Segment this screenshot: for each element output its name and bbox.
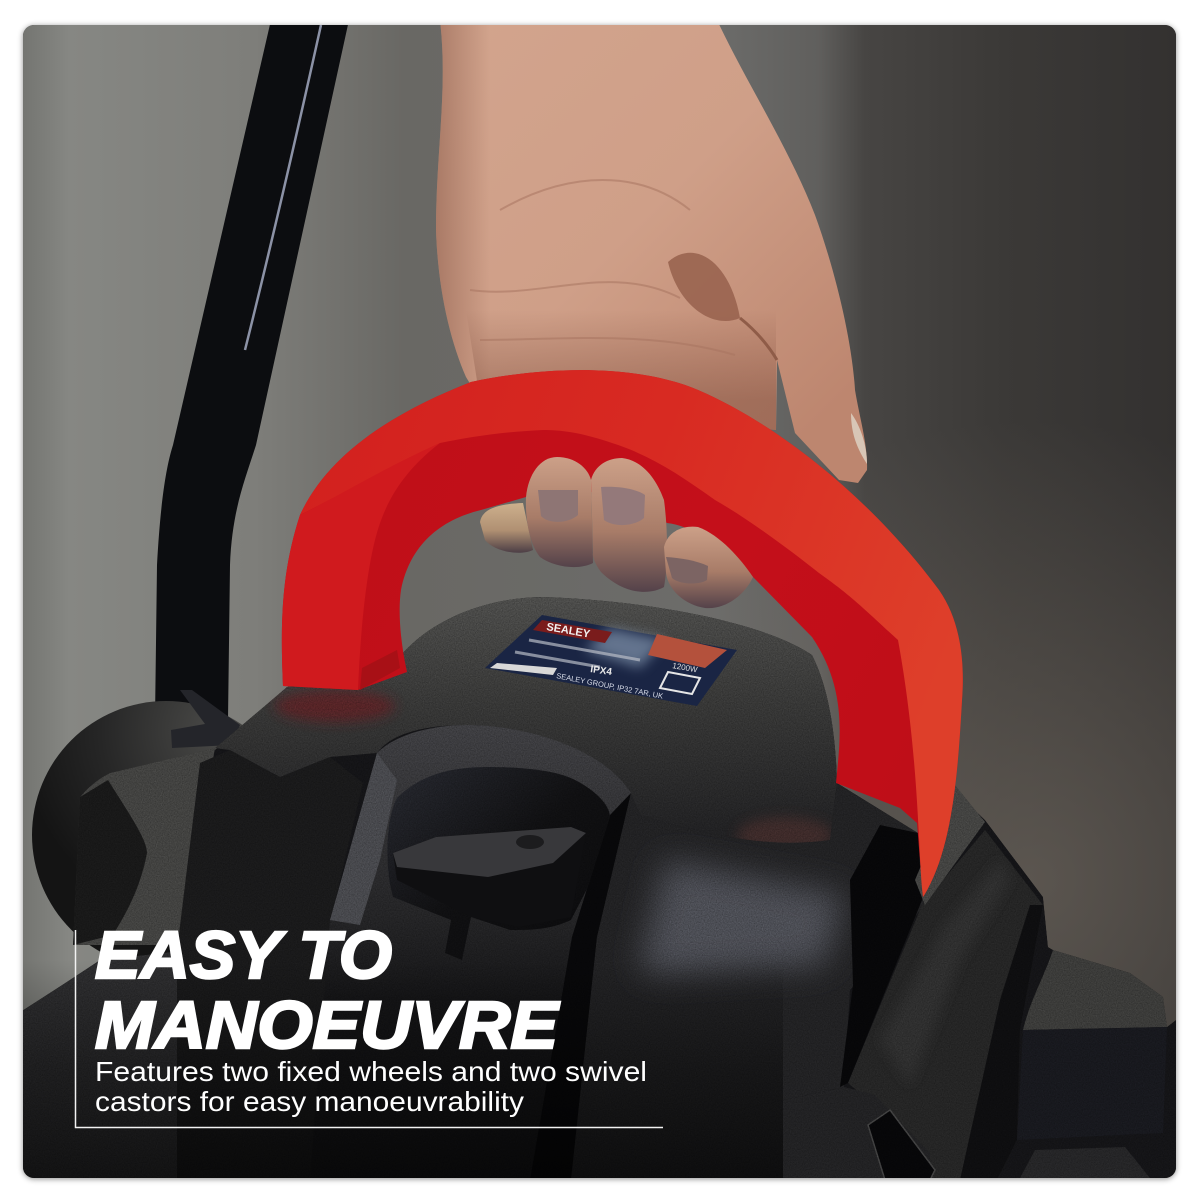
centre highlight xyxy=(640,860,845,975)
rear wheel xyxy=(32,690,242,956)
right black channel xyxy=(840,825,922,1087)
vents xyxy=(868,1110,935,1180)
shelf front xyxy=(1017,1027,1167,1140)
brand name: SEALEY xyxy=(545,621,592,641)
address: SEALEY GROUP, IP32 7AR, UK xyxy=(556,671,664,701)
shelf foot xyxy=(1020,1147,1150,1178)
lower left base xyxy=(20,950,190,1180)
red reflection left xyxy=(275,690,395,722)
vacuum body xyxy=(20,597,1176,1180)
body base silhouette xyxy=(177,597,1176,1180)
right ribbed band xyxy=(848,830,1043,1180)
heading: MANOEUVRE xyxy=(95,988,560,1063)
description text: castors for easy manoeuvrability xyxy=(95,1086,524,1117)
handle inner face xyxy=(282,370,963,897)
description text xyxy=(95,1056,647,1117)
hand and palm xyxy=(436,20,867,483)
dark side panel xyxy=(177,757,214,1178)
switch surround xyxy=(327,725,631,971)
lobe right of handle xyxy=(915,785,985,905)
shelf top xyxy=(1023,950,1167,1030)
power rating: 1200W xyxy=(672,661,699,674)
handle leg highlight xyxy=(282,443,440,690)
rating label xyxy=(485,615,737,706)
fingernails xyxy=(538,490,578,522)
lower shelf xyxy=(735,1087,930,1178)
description text: Features two fixed wheels and two swivel xyxy=(95,1056,647,1087)
ingress rating: IPX4 xyxy=(590,664,613,678)
left hump xyxy=(73,748,215,945)
handle top face xyxy=(300,370,963,897)
power switch xyxy=(393,827,586,895)
switch well xyxy=(387,767,610,960)
hump shadow xyxy=(73,780,147,945)
handle notches xyxy=(360,650,400,690)
red reflection right xyxy=(736,814,832,843)
heading: EASY TO xyxy=(95,918,392,993)
red carry handle xyxy=(282,370,963,897)
dome shell xyxy=(215,597,837,843)
vacuum hose pole xyxy=(155,20,349,720)
dark overlay behind caption xyxy=(23,960,783,1178)
left rim strip xyxy=(330,753,397,925)
centre panel xyxy=(580,784,924,1130)
black channel xyxy=(541,793,631,1126)
caption frame lines xyxy=(76,930,663,1128)
heading xyxy=(95,918,560,1063)
fingers xyxy=(480,457,753,608)
